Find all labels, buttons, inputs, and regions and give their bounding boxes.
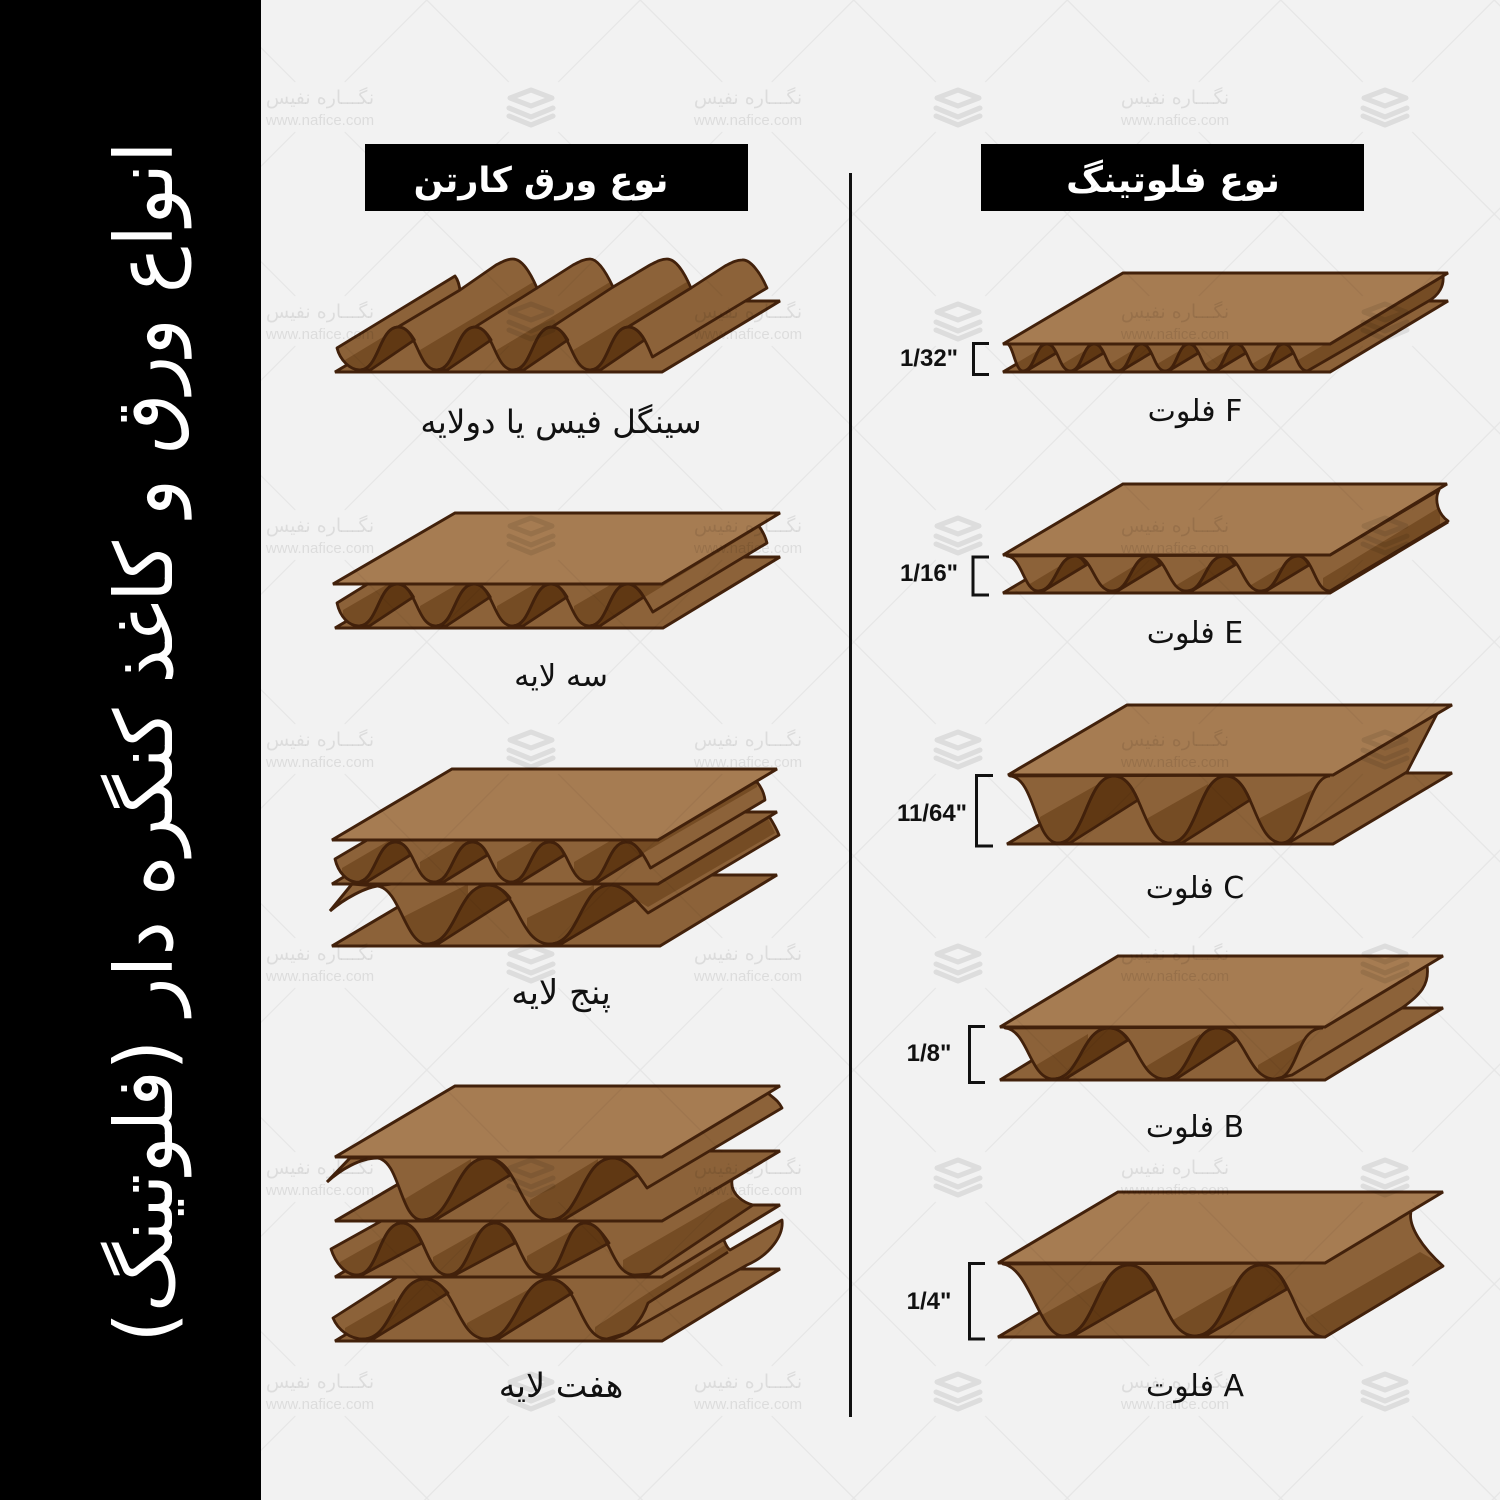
- watermark layer: [265, 86, 1229, 1413]
- watermark layer: www.nafice.com: [1120, 968, 1229, 985]
- panel: black title sidebar: [0, 0, 261, 1500]
- dimension: 11/64 inch: [897, 776, 993, 846]
- diagram: flute C: [1007, 705, 1452, 849]
- label: flute F: F فلوت: [1148, 394, 1242, 429]
- diagram: five-layer board: [330, 769, 779, 954]
- watermark layer: www.nafice.com: [265, 1182, 374, 1199]
- watermark layer: نگـــاره نفیس: [266, 942, 374, 965]
- watermark layer: نگـــاره نفیس: [266, 300, 374, 323]
- dimension: 1/16 inch: 1/16": [900, 560, 958, 587]
- watermark layer: www.nafice.com: [693, 968, 802, 985]
- watermark layer: نگـــاره نفیس: [1121, 300, 1229, 323]
- watermark layer: www.nafice.com: [265, 540, 374, 557]
- diagram: single face two-layer board: [335, 259, 780, 375]
- diagram: flute E: [1003, 484, 1448, 600]
- watermark layer: www.nafice.com: [265, 968, 374, 985]
- dimension: 1/8 inch: [907, 1026, 985, 1082]
- diagram: flute F: [1003, 273, 1448, 380]
- dimension: 1/32 inch: 1/32": [900, 345, 958, 372]
- diagram: flute B: [1000, 956, 1443, 1084]
- heading: fluting type: نوع فلوتینگ: [1066, 159, 1280, 201]
- watermark layer: www.nafice.com: [693, 1396, 802, 1413]
- title: vertical main heading: انواع ورق و کاغذ کنگره دار (فلوتینگ): [98, 141, 192, 1343]
- watermark layer: نگـــاره نفیس: [266, 86, 374, 109]
- dimension: 11/64 inch: 11/64": [897, 800, 967, 827]
- watermark layer: www.nafice.com: [1120, 1396, 1229, 1413]
- watermark layer: نگـــاره نفیس: [1121, 1156, 1229, 1179]
- watermark layer: www.nafice.com: [693, 540, 802, 557]
- watermark layer: نگـــاره نفیس: [1121, 728, 1229, 751]
- watermark layer: نگـــاره نفیس: [1121, 942, 1229, 965]
- watermark layer: نگـــاره نفیس: [266, 1370, 374, 1393]
- label: single face: سینگل فیس یا دولایه: [420, 403, 702, 441]
- watermark layer: نگـــاره نفیس: [694, 728, 802, 751]
- watermark layer: نگـــاره نفیس: [1121, 1370, 1229, 1393]
- watermark layer: نگـــاره نفیس: [694, 86, 802, 109]
- label: flute B: B فلوت: [1146, 1110, 1244, 1145]
- heading: carton sheet type: نوع ورق کارتن: [414, 161, 668, 201]
- dimension: 1/16 inch: [900, 557, 989, 595]
- label: flute E: E فلوت: [1147, 616, 1243, 651]
- watermark layer: نگـــاره نفیس: [1121, 86, 1229, 109]
- diagram: seven-layer board: [327, 1086, 782, 1347]
- watermark layer: نگـــاره نفیس: [1121, 514, 1229, 537]
- watermark layer: www.nafice.com: [1120, 326, 1229, 343]
- watermark layer: www.nafice.com: [693, 1182, 802, 1199]
- heading: fluting type: [981, 144, 1364, 211]
- watermark layer: نگـــاره نفیس: [694, 1156, 802, 1179]
- watermark layer: www.nafice.com: [1120, 112, 1229, 129]
- watermark layer: www.nafice.com: [693, 326, 802, 343]
- watermark layer: www.nafice.com: [265, 1396, 374, 1413]
- label: three layer: سه لایه: [514, 659, 608, 694]
- label: flute A: A فلوت: [1146, 1369, 1245, 1404]
- watermark layer: نگـــاره نفیس: [694, 514, 802, 537]
- dimension: 1/4 inch: 1/4": [907, 1288, 951, 1315]
- label: flute C: C فلوت: [1146, 871, 1244, 906]
- dimension: 1/32 inch: [900, 344, 989, 374]
- diagram: flute A: [998, 1192, 1445, 1343]
- watermark layer: www.nafice.com: [265, 754, 374, 771]
- watermark layer: نگـــاره نفیس: [266, 1156, 374, 1179]
- dimension: 1/8 inch: 1/8": [907, 1040, 951, 1067]
- dimension: 1/4 inch: [907, 1264, 985, 1339]
- watermark layer: www.nafice.com: [1120, 754, 1229, 771]
- watermark layer: www.nafice.com: [693, 112, 802, 129]
- watermark layer: نگـــاره نفیس: [694, 1370, 802, 1393]
- watermark layer: نگـــاره نفیس: [266, 728, 374, 751]
- watermark layer: نگـــاره نفیس: [694, 942, 802, 965]
- column divider: [849, 173, 852, 1417]
- label: seven layer: هفت لایه: [499, 1366, 623, 1405]
- watermark stacked layer icons: [509, 90, 1407, 1409]
- watermark layer: www.nafice.com: [265, 112, 374, 129]
- watermark layer: www.nafice.com: [1120, 540, 1229, 557]
- watermark layer: نگـــاره نفیس: [266, 514, 374, 537]
- watermark layer: www.nafice.com: [265, 326, 374, 343]
- diagram: three-layer board: [333, 510, 780, 633]
- watermark layer: www.nafice.com: [693, 754, 802, 771]
- label: five layer: پنج لایه: [511, 973, 611, 1013]
- watermark layer: www.nafice.com: [1120, 1182, 1229, 1199]
- watermark layer: نگـــاره نفیس: [694, 300, 802, 323]
- heading: carton sheet type: [365, 144, 748, 211]
